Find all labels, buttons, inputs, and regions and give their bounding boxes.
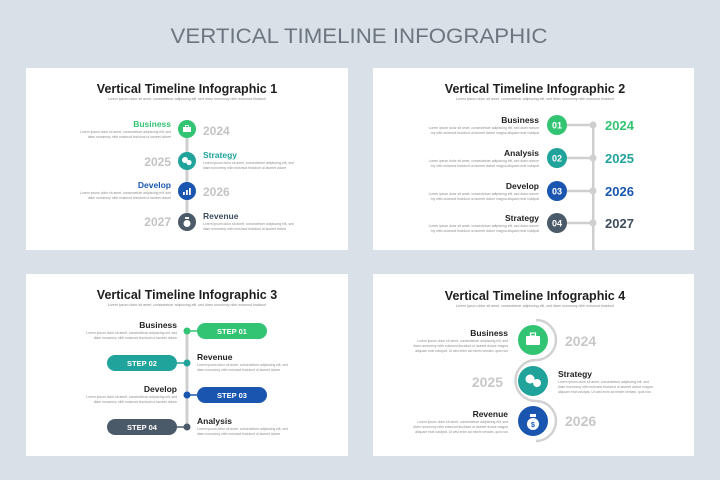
panel: infographic 3: Lorem ipsum dolor sit amet, consectetuer adipiscing elit, sed diam nonummy nibh euismod tincidunt [108, 303, 266, 307]
item revenue 2026: 2026 [565, 413, 596, 429]
item business 2024: Lorem ipsum dolor sit amet, consectetuer adipiscing elit, sed [417, 339, 508, 343]
step 03 pill [86, 384, 267, 404]
item 2025 strategy: 2025 [144, 155, 171, 169]
panel: infographic 1: Lorem ipsum dolor sit amet, consectetuer adipiscing elit, sed diam nonummy nibh euismod tincidunt [108, 97, 266, 101]
step 02: 2025 [605, 151, 634, 166]
step 03: my nibh euismod tincidunt ut laoreet dolore magna aliquam erat volutpat [431, 197, 539, 201]
step 02: 02 [552, 154, 562, 164]
panel: infographic 2: Lorem ipsum dolor sit amet, consectetuer adipiscing elit, sed diam nonummy nibh euismod tincidunt [456, 97, 614, 101]
panel 2 title: Vertical Timeline Infographic 2 [445, 82, 625, 96]
step 03 pill: STEP 03 [217, 391, 247, 400]
item 2027 revenue: 2027 [144, 215, 171, 229]
step 04 pill: diam nonummy nibh euismod tincidunt ut laoreet dolore [197, 432, 280, 436]
icon: revenue money bag [518, 406, 548, 436]
step 02: Analysis [504, 148, 539, 158]
panel: infographic 4 [373, 274, 694, 456]
step 01 pill: STEP 01 [217, 327, 247, 336]
step 03 pill: Develop [144, 384, 177, 394]
step 01: Business [501, 115, 539, 125]
item 2026 develop [80, 180, 230, 200]
item 2025 strategy: Lorem ipsum dolor sit amet, consectetuer adipiscing elit, sed [203, 161, 294, 165]
icon: business briefcase [518, 325, 548, 355]
step 03 pill: diam nonummy nibh euismod tincidunt ut laoreet dolore [94, 400, 177, 404]
item 2024 business: 2024 [203, 124, 230, 138]
panel 1 title: Vertical Timeline Infographic 1 [97, 82, 277, 96]
panel 4 title: Vertical Timeline Infographic 4 [445, 289, 625, 303]
step 01 pill [86, 320, 267, 340]
panel: infographic 3 [26, 274, 348, 456]
step 02 pill: STEP 02 [127, 359, 157, 368]
step 02: Lorem ipsum dolor sit amet, consectetuer adipiscing elit, sed diam nonum [429, 159, 539, 163]
step 03 [429, 181, 634, 201]
item 2027 revenue: Lorem ipsum dolor sit amet, consectetuer adipiscing elit, sed [203, 222, 294, 226]
step 04: Lorem ipsum dolor sit amet, consectetuer adipiscing elit, sed diam nonum [429, 224, 539, 228]
step 03: Develop [506, 181, 539, 191]
item 2025 strategy: diam nonummy nibh euismod tincidunt ut laoreet dolore [203, 166, 286, 170]
step 04: my nibh euismod tincidunt ut laoreet dolore magna aliquam erat volutpat [431, 229, 539, 233]
icon: strategy puzzle [518, 366, 548, 396]
item 2024 business: diam nonummy nibh euismod tincidunt ut laoreet dolore [88, 135, 171, 139]
step 01 [429, 115, 635, 135]
step 01: Lorem ipsum dolor sit amet, consectetuer adipiscing elit, sed diam nonum [429, 126, 539, 130]
item strategy 2025: Strategy [558, 369, 592, 379]
item strategy 2025: aliquam erat volutpat. Ut wisi enim ad minim veniam, quis nos [558, 390, 651, 394]
item strategy 2025: Lorem ipsum dolor sit amet, consectetuer adipiscing elit, sed [558, 380, 649, 384]
item 2025 strategy: Strategy [203, 150, 237, 160]
step 01 pill: diam nonummy nibh euismod tincidunt ut laoreet dolore [94, 336, 177, 340]
step 02 pill: Lorem ipsum dolor sit amet, consectetuer adipiscing elit, sed [197, 363, 288, 367]
step 02: my nibh euismod tincidunt ut laoreet dolore magna aliquam erat volutpat [431, 164, 539, 168]
item 2027 revenue: diam nonummy nibh euismod tincidunt ut laoreet dolore [203, 227, 286, 231]
item 2026 develop: 2026 [203, 185, 230, 199]
step 01: 2024 [605, 118, 635, 133]
item 2026 develop: diam nonummy nibh euismod tincidunt ut laoreet dolore [88, 196, 171, 200]
step 02 pill: diam nonummy nibh euismod tincidunt ut laoreet dolore [197, 368, 280, 372]
step 04 pill [107, 416, 288, 436]
step 03: 03 [552, 186, 562, 196]
step 04: 2027 [605, 216, 634, 231]
item business 2024 [413, 328, 596, 353]
item business 2024: aliquam erat volutpat. Ut wisi enim ad minim veniam, quis nos [415, 349, 508, 353]
item 2025 strategy [144, 150, 294, 170]
icon: develop [178, 182, 196, 200]
item revenue 2026 [413, 409, 596, 434]
item business 2024: diam nonummy nibh euismod tincidunt ut laoreet dolore magna [413, 344, 508, 348]
step 01 pill: Lorem ipsum dolor sit amet, consectetuer adipiscing elit, sed [86, 331, 177, 335]
item 2026 develop: Lorem ipsum dolor sit amet, consectetuer adipiscing elit, sed [80, 191, 171, 195]
step 04 [429, 213, 634, 233]
item revenue 2026: Lorem ipsum dolor sit amet, consectetuer adipiscing elit, sed [417, 420, 508, 424]
item revenue 2026: diam nonummy nibh euismod tincidunt ut laoreet dolore magna [413, 425, 508, 429]
step 04: Strategy [505, 213, 539, 223]
step 03: 2026 [605, 184, 634, 199]
step 03 pill: Lorem ipsum dolor sit amet, consectetuer adipiscing elit, sed [86, 395, 177, 399]
item strategy 2025: diam nonummy nibh euismod tincidunt ut laoreet dolore magna [558, 385, 653, 389]
item 2026 develop: Develop [138, 180, 171, 190]
step 02 pill [107, 352, 288, 372]
item revenue 2026: Revenue [473, 409, 508, 419]
item 2024 business: Lorem ipsum dolor sit amet, consectetuer adipiscing elit, sed [80, 130, 171, 134]
step 04 pill: Analysis [197, 416, 232, 426]
main title: VERTICAL TIMELINE INFOGRAPHIC [170, 25, 548, 48]
icon: revenue [178, 213, 196, 231]
step 01: 01 [552, 120, 562, 130]
item revenue 2026: aliquam erat volutpat. Ut wisi enim ad minim veniam, quis nos [415, 430, 508, 434]
icon: strategy [178, 152, 196, 170]
s-curve connector [516, 320, 556, 441]
item 2027 revenue [144, 211, 294, 231]
step 04 pill: Lorem ipsum dolor sit amet, consectetuer adipiscing elit, sed [197, 427, 288, 431]
step 02 pill: Revenue [197, 352, 233, 362]
panel: infographic 1 [26, 68, 348, 250]
panel: infographic 2 [373, 68, 694, 250]
step 03: Lorem ipsum dolor sit amet, consectetuer adipiscing elit, sed diam nonum [429, 192, 539, 196]
item 2027 revenue: Revenue [203, 211, 239, 221]
icon: business [178, 120, 196, 138]
item business 2024: Business [470, 328, 508, 338]
item 2024 business [80, 119, 230, 139]
step 04 pill: STEP 04 [127, 423, 158, 432]
panel 3 title: Vertical Timeline Infographic 3 [97, 288, 277, 302]
panel: infographic 4: Lorem ipsum dolor sit amet, consectetuer adipiscing elit, sed diam nonummy nibh euismod tincidunt [456, 304, 614, 308]
item business 2024: 2024 [565, 333, 596, 349]
item strategy 2025 [472, 369, 653, 394]
icon: revenue money bag: $ [531, 422, 535, 429]
step 02 [429, 148, 634, 168]
step 01 pill: Business [139, 320, 177, 330]
item strategy 2025: 2025 [472, 374, 503, 390]
step 01: my nibh euismod tincidunt ut laoreet dolore magna aliquam erat volutpat [431, 131, 539, 135]
item 2024 business: Business [133, 119, 171, 129]
step 04: 04 [552, 218, 562, 228]
